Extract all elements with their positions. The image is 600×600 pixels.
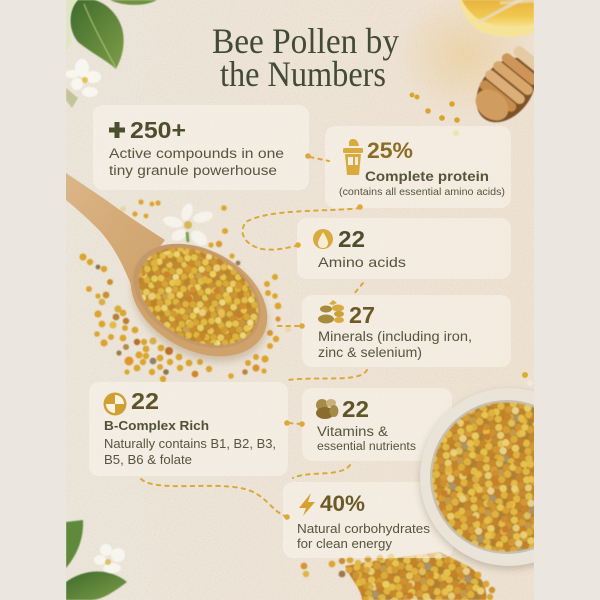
card: 22 b-complex rich (89, 382, 288, 476)
icon: amino drop (313, 229, 333, 249)
card: 250+ active compounds: tiny granule powerhouse (109, 163, 277, 178)
card: 27 minerals (302, 295, 511, 367)
icon: plus (109, 122, 125, 138)
grains: bottom scatter (301, 552, 495, 600)
connector: top loop (243, 204, 363, 250)
card: 22 amino acids: Amino acids (318, 254, 406, 270)
connector: spoon to minerals (278, 323, 305, 329)
leaves: bottom left (66, 520, 127, 600)
icon: b-complex capsule (104, 392, 126, 416)
flower: by spoon (163, 204, 213, 246)
card: 22 b-complex rich: Naturally contains B1, B2, B3, (104, 437, 276, 451)
connector: minerals to b-complex (288, 370, 367, 380)
honey jar (459, 0, 534, 37)
icon: lightning bolt (299, 493, 315, 516)
icon: minerals (318, 300, 344, 324)
card: 25% complete protein: (contains all essential amino acids) (339, 186, 505, 198)
scattered grains around spoon (79, 199, 291, 382)
connector: b-complex to vitamins (284, 420, 305, 427)
card: 22 amino acids (297, 218, 511, 279)
card: 25% complete protein: 25% (367, 138, 413, 163)
card: 40% carbohydrates: 40% (320, 491, 365, 516)
connector: card 3 to card 4 (353, 283, 363, 295)
card: 22 vitamins: Vitamins & (317, 424, 388, 439)
card: 27 minerals: Minerals (including iron, (318, 329, 472, 344)
flower: bottom left (94, 544, 125, 573)
card: 40% carbohydrates: Natural corbohydrates (297, 521, 431, 536)
sand background panel (66, 0, 535, 600)
scattered grains: near bowl top (522, 372, 533, 386)
card: 40% carbohydrates: for clean energy (297, 536, 392, 551)
leaves: top left (66, 0, 157, 69)
card: 25% complete protein: Complete protein (365, 168, 489, 184)
wooden spoon (66, 173, 271, 366)
card: 22 amino acids: 22 (338, 226, 365, 252)
title: the Numbers (220, 54, 386, 94)
flower: top left (65, 59, 101, 108)
card: 250+ active compounds (93, 105, 309, 190)
card: 250+ active compounds: 250+ (130, 117, 186, 143)
icon: protein shaker (343, 139, 363, 175)
card: 27 minerals: 27 (349, 302, 375, 328)
card: 22 b-complex rich: 22 (131, 388, 159, 414)
bowl of pollen (416, 388, 534, 572)
card: 250+ active compounds: Active compounds in one (109, 146, 284, 161)
title (212, 28, 399, 86)
card: 25% complete protein (325, 126, 511, 208)
card: 22 vitamins (302, 388, 452, 461)
card: 22 vitamins: 22 (342, 396, 369, 422)
card: 22 b-complex rich: B-Complex Rich (104, 418, 209, 433)
honey dipper (475, 46, 534, 123)
scattered grains: top right (410, 92, 460, 136)
card: 40% carbohydrates (283, 482, 453, 558)
card: 27 minerals: zinc & selenium) (318, 345, 422, 360)
icon: vitamin seeds (316, 399, 338, 419)
connector: card 1 to card 2 (305, 153, 329, 161)
title: Bee Pollen by (212, 21, 399, 61)
connector: vitamins to carbohydrates (293, 465, 350, 478)
pollen in spoon (138, 247, 259, 346)
card: 22 vitamins: essential nutrients (317, 441, 416, 453)
card: 22 b-complex rich: B5, B6 & folate (104, 453, 192, 467)
connector: b-complex to carbohydrates (141, 479, 290, 520)
